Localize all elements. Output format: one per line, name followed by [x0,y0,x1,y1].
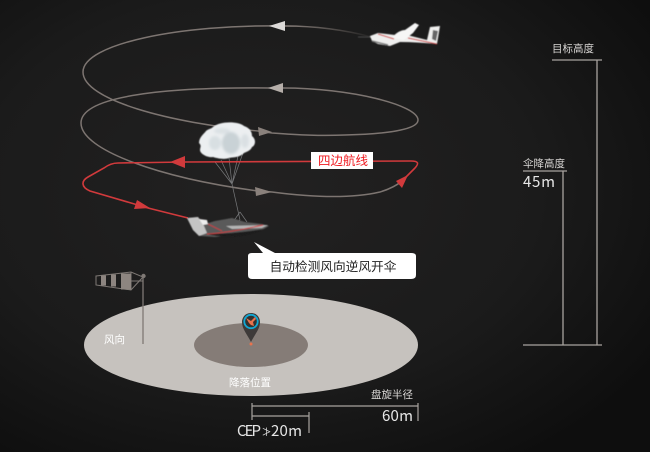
callout [248,242,416,279]
arrowheads [134,21,408,209]
aircraft: top [358,23,440,46]
parachute [199,122,255,222]
dimension: parachute altitude: 45m [523,171,555,192]
dimension: target altitude [552,42,602,345]
flight spiral path [81,26,418,197]
windsock [96,272,146,344]
label: 四边航线: 四边航线 [318,153,368,168]
dimension: loiter radius [252,388,418,426]
label: 风向: 风向 [104,333,125,346]
dimension: loiter radius: 盘旋半径 [371,388,413,401]
dimension: CEP: 20m [271,420,302,441]
callout: 自动检测风向逆风开伞 [270,259,397,274]
ground line [523,344,602,346]
dimension: parachute altitude [523,157,567,345]
map pin [242,313,260,346]
dimension: CEP [237,412,309,441]
label: 四边航线 [311,152,373,169]
dimension: loiter radius: 60m [382,405,413,426]
label: 降落位置: 降落位置 [229,376,271,389]
dimension: CEP: ≯ [262,424,272,438]
dimension: CEP: CEP [237,420,261,441]
red circuit path [83,161,418,218]
dimension: parachute altitude: 伞降高度 [523,157,565,170]
dimension: target altitude: 目标高度 [552,42,594,55]
aircraft: under parachute [187,217,269,237]
landing area [84,294,418,396]
